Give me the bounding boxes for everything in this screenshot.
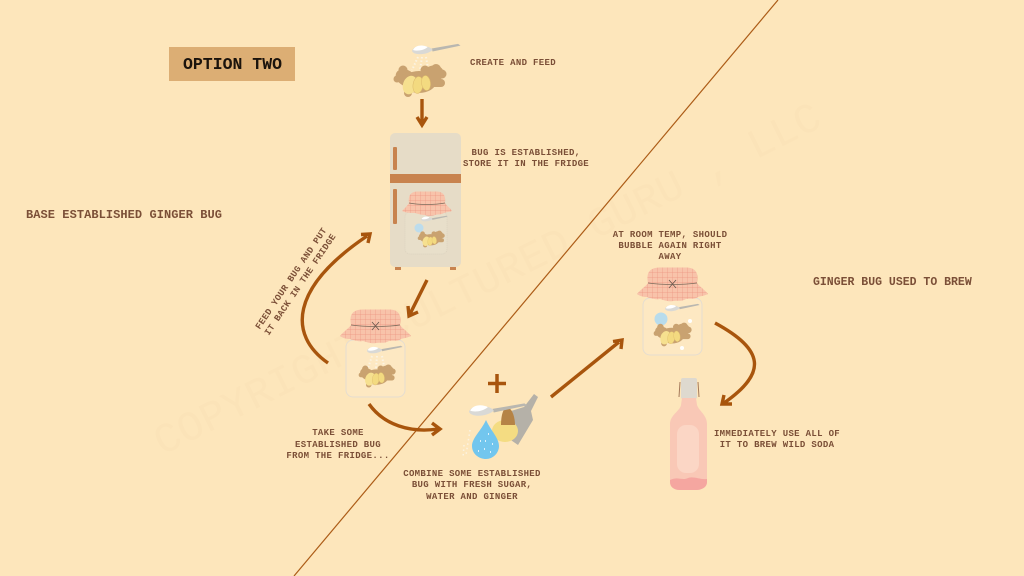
text: take some established bug: FROM THE FRIDGE... <box>286 451 390 461</box>
heading: ginger bug used to brew: GINGER BUG USED TO BREW <box>813 276 972 289</box>
icon: jar in fridge <box>402 192 452 254</box>
icon: ginger and spoon <box>392 44 461 97</box>
diagonal divider line <box>294 0 778 576</box>
text: bug is established <box>463 148 589 169</box>
title badge: option two: OPTION TWO <box>183 55 282 74</box>
text: combine: BUG WITH FRESH SUGAR, <box>412 480 532 490</box>
text: take some established bug: TAKE SOME <box>312 428 364 438</box>
text: combine: COMBINE SOME ESTABLISHED <box>403 469 541 479</box>
text: at room temp <box>613 230 728 262</box>
text: take some established bug <box>286 428 390 461</box>
icon: plus <box>488 374 506 393</box>
text: at room temp: AWAY <box>659 252 682 262</box>
arrow: fridge to jar <box>408 280 427 316</box>
text: take some established bug: ESTABLISHED BUG <box>295 440 381 450</box>
arrow: ginger to fridge <box>417 99 427 125</box>
text: at room temp: AT ROOM TEMP, SHOULD <box>613 230 728 240</box>
arrow: combine to bubbling jar <box>551 340 622 397</box>
icon: scoop, sugar, spoon and water drop <box>463 394 538 459</box>
watermark: COPYRIGHT CULTURED GURU , LLC <box>147 94 830 467</box>
icon: fridge with jar <box>390 133 461 270</box>
text: feed your bug: FEED YOUR BUG AND PUT <box>254 226 330 331</box>
text: feed your bug: IT BACK IN THE FRIDGE <box>263 232 339 338</box>
arrow: jar to bottle <box>715 323 754 404</box>
icon: jar with ginger <box>340 310 411 397</box>
arrow: jar to combine <box>369 404 440 435</box>
arrow: feed loop back to fridge <box>302 234 370 363</box>
text: combine: WATER AND GINGER <box>426 492 518 502</box>
text: immediately use <box>714 429 840 450</box>
text: immediately use: IT TO BREW WILD SODA <box>720 440 835 450</box>
text: at room temp: BUBBLE AGAIN RIGHT <box>618 241 722 251</box>
icon: bubbling jar <box>637 268 708 355</box>
icon: soda bottle <box>670 378 707 490</box>
text: combine <box>403 469 541 502</box>
title badge: option two <box>169 47 295 81</box>
heading: base established ginger bug: BASE ESTABLISHED GINGER BUG <box>26 208 222 222</box>
text: immediately use: IMMEDIATELY USE ALL OF <box>714 429 840 439</box>
text: bug is established: STORE IT IN THE FRIDGE <box>463 159 589 169</box>
text: create and feed: CREATE AND FEED <box>470 58 556 68</box>
text: bug is established: BUG IS ESTABLISHED, <box>472 148 580 158</box>
